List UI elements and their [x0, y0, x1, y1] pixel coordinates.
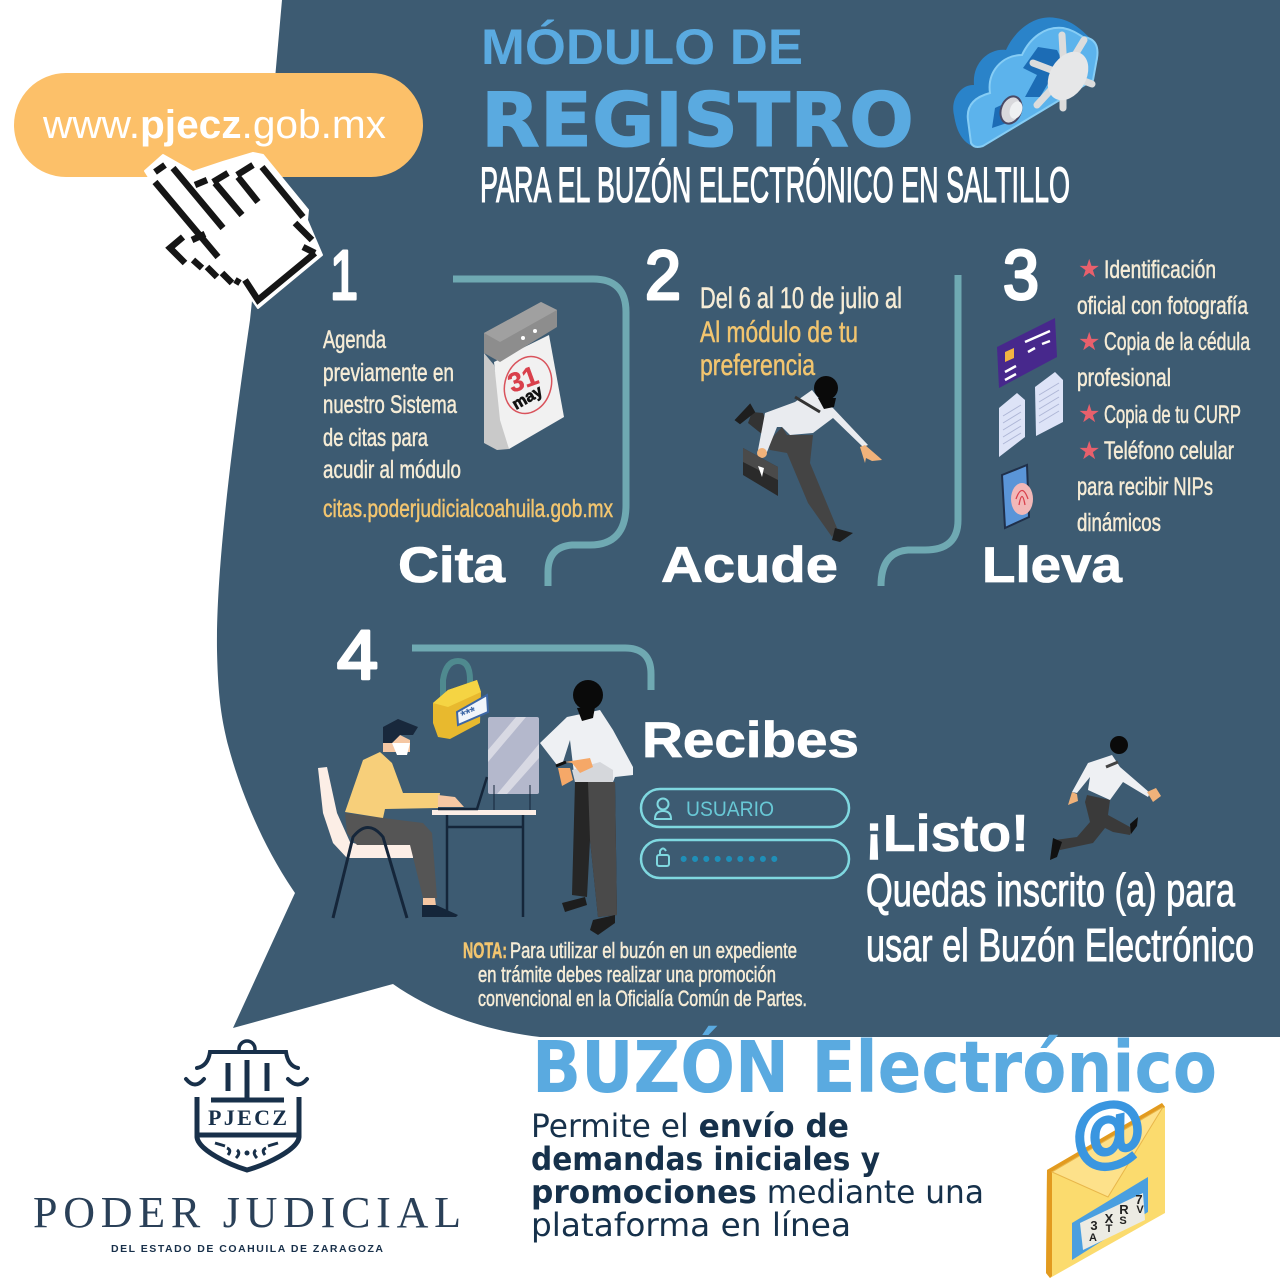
icon: envelope with at sign: A: [1089, 1232, 1097, 1244]
url pill: www.pjecz.gob.mx: [42, 103, 386, 147]
icon: calendar: 31: [504, 360, 542, 399]
text: step 3 requirements list: ★: [1078, 255, 1100, 283]
step 4 label: Recibes: [642, 712, 859, 768]
icon: documents: [999, 372, 1063, 457]
logo subtitle: DEL ESTADO DE COAHUILA DE ZARAGOZA: [111, 1243, 383, 1255]
icon: envelope with at sign: @: [1063, 1082, 1153, 1181]
icon: envelope with at sign: V: [1136, 1204, 1144, 1216]
text: step 3 requirements list: profesional: [1077, 364, 1171, 392]
text: step 1 description: de citas para: [323, 424, 428, 452]
text: buzón description: promociones mediante una: [531, 1173, 984, 1211]
title: módulo de registro: REGISTRO: [481, 76, 914, 164]
step 2 label: Acude: [661, 537, 838, 593]
step 1 label: Cita: [398, 537, 506, 593]
illustration: seated person at desk: [318, 719, 536, 918]
text: step 1 description: acudir al módulo: [323, 456, 461, 484]
text: buzón description: [531, 1107, 984, 1244]
text: listo message: [865, 805, 1254, 971]
text: buzón description: plataforma en línea: [531, 1206, 851, 1244]
text: nota: Para utilizar el buzón en un expediente: [510, 938, 797, 963]
input: password: [641, 840, 849, 878]
illustration: man walking with briefcase: [736, 376, 882, 542]
connector line 1: [453, 279, 626, 586]
text: buzón description: demandas iniciales y: [531, 1140, 880, 1178]
text: step 1 description: citas.poderjudicialcoahuila.gob.mx: [323, 495, 613, 523]
text: step 3 requirements list: Teléfono celular: [1104, 437, 1234, 465]
text: nota: NOTA:: [463, 938, 507, 963]
text: listo message: ¡Listo!: [865, 805, 1029, 863]
icon: phone with fingerprint: [1002, 465, 1033, 528]
text: step 3 requirements list: [1077, 255, 1250, 537]
title: módulo de registro: MÓDULO DE: [481, 19, 803, 75]
text: buzón description: Permite el envío de: [531, 1107, 849, 1145]
connector line 2: [881, 275, 958, 586]
icon: calendar: may: [510, 383, 546, 413]
icon: envelope with at sign: 3: [1090, 1218, 1098, 1233]
step 2 number: 2: [645, 236, 681, 314]
logo text: poder judicial: PODER JUDICIAL: [33, 1188, 461, 1237]
icon: padlock: [433, 661, 488, 739]
text: step 3 requirements list: dinámicos: [1077, 509, 1161, 537]
text: step 3 requirements list: ★: [1078, 328, 1100, 356]
text: step 3 requirements list: Identificación: [1104, 256, 1216, 284]
text: step 1 description: nuestro Sistema: [323, 391, 457, 419]
text: step 3 requirements list: ★: [1078, 437, 1100, 465]
icon: cloud vault: [953, 17, 1098, 147]
icon: envelope with at sign: S: [1119, 1215, 1127, 1227]
title: módulo de registro: [480, 19, 1070, 213]
illustration: standing person checking watch: [540, 680, 633, 935]
icon: envelope with at sign: T: [1106, 1223, 1113, 1235]
step 4 number: 4: [337, 616, 378, 694]
panel: speech bubble background: [217, 0, 1280, 1037]
step 1 number: 1: [330, 236, 358, 314]
logo: pjecz shield: PJECZ: [208, 1105, 287, 1130]
text: nota: convencional en la Oficialía Común de Partes.: [478, 986, 807, 1011]
text: nota: [463, 938, 807, 1011]
icon: envelope with at sign: X: [1105, 1211, 1114, 1226]
icon: envelope with at sign: 7: [1135, 1192, 1143, 1207]
connector line 3: [412, 648, 651, 690]
icon: id card: [997, 318, 1057, 388]
step 3 label: Lleva: [982, 537, 1123, 593]
text: step 2 description: Del 6 al 10 de julio al: [700, 282, 902, 315]
input: usuario: USUARIO: [686, 798, 774, 821]
illustration: glass screen: [488, 717, 539, 810]
text: step 3 requirements list: ★: [1078, 400, 1100, 428]
text: nota: en trámite debes realizar una promoción: [478, 962, 776, 987]
heading: buzón electrónico: BUZÓN Electrónico: [532, 1026, 1217, 1109]
text: step 3 requirements list: para recibir NIPs: [1077, 473, 1213, 501]
input: usuario: [641, 789, 849, 827]
text: step 2 description: [700, 282, 902, 382]
icon: calendar: [484, 302, 564, 450]
text: step 2 description: Al módulo de tu: [700, 316, 858, 349]
text: step 1 description: [323, 326, 613, 523]
illustration: running man: [1050, 736, 1161, 860]
input: password: •••••••••: [680, 848, 778, 871]
icon: envelope with at sign: R: [1119, 1202, 1129, 1217]
text: step 1 description: previamente en: [323, 359, 454, 387]
text: step 1 description: Agenda: [323, 326, 386, 354]
step 3 number: 3: [1003, 236, 1039, 314]
url pill: [14, 73, 423, 177]
logo: pjecz shield: [186, 1041, 307, 1170]
icon: pixel hand cursor: [145, 153, 322, 308]
icon: envelope with at sign: [1046, 1082, 1165, 1278]
text: step 2 description: preferencia: [700, 349, 815, 382]
icon: padlock: ***: [459, 703, 479, 723]
